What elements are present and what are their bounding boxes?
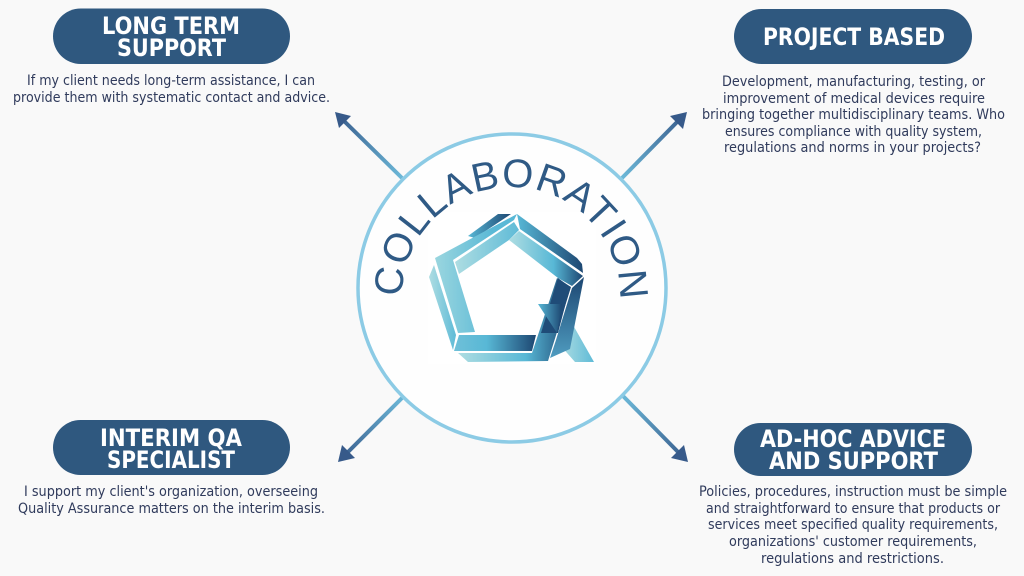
- pill heading: project based: PROJECT BASED: [763, 23, 945, 51]
- pill heading: project based: [734, 9, 972, 64]
- pill heading: long term support: [53, 8, 290, 64]
- text block: project description: bringing together multidisciplinary teams. Who: [702, 107, 1005, 123]
- pill heading: long term support: SUPPORT: [117, 34, 227, 62]
- text block: long term description: provide them with systematic contact and advice.: [13, 90, 330, 106]
- text block: ad-hoc description: regulations and restrictions.: [761, 551, 944, 567]
- panel: project based: [702, 9, 1005, 156]
- text block: long term description: [13, 73, 330, 106]
- arrow: to project based: [622, 112, 687, 178]
- text block: ad-hoc description: Policies, procedures, instruction must be simple: [699, 484, 1007, 500]
- pill heading: long term support: LONG TERM: [102, 12, 240, 40]
- pill heading: interim QA specialist: [53, 420, 290, 475]
- text block: project description: [702, 74, 1005, 156]
- arrow: to long term support: [335, 112, 402, 178]
- arrow: to ad-hoc advice: [623, 396, 688, 462]
- logo: pentagon Q mark: [428, 212, 596, 364]
- text block: ad-hoc description: and straightforward to ensure that products or: [706, 501, 1000, 517]
- pill heading: ad-hoc advice and support: AND SUPPORT: [769, 447, 939, 475]
- pill heading: interim QA specialist: INTERIM QA: [100, 424, 242, 452]
- panel: ad-hoc advice and support: [699, 423, 1007, 567]
- pill heading: interim QA specialist: SPECIALIST: [107, 446, 236, 474]
- text block: long term description: If my client needs long-term assistance, I can: [27, 73, 315, 89]
- pill heading: ad-hoc advice and support: AD-HOC ADVICE: [760, 425, 946, 453]
- text block: project description: improvement of medical devices require: [723, 91, 985, 107]
- text block: interim description: Quality Assurance matters on the interim basis.: [18, 501, 325, 517]
- circular heading: collaboration: COLLABORATION: [375, 159, 648, 296]
- text block: project description: ensures compliance with quality system,: [725, 124, 982, 140]
- text block: interim description: I support my client's organization, overseeing: [24, 484, 318, 500]
- central circle: [358, 134, 666, 442]
- pill heading: ad-hoc advice and support: [734, 423, 972, 476]
- text block: interim description: [18, 484, 325, 517]
- arrow: to interim QA specialist: [338, 397, 403, 462]
- panel: long term support: [13, 8, 330, 106]
- text block: ad-hoc description: organizations' customer requirements,: [729, 534, 977, 550]
- panel: interim QA specialist: [18, 420, 325, 517]
- text block: ad-hoc description: [699, 484, 1007, 567]
- text block: project description: regulations and norms in your projects?: [724, 140, 981, 156]
- text block: project description: Development, manufacturing, testing, or: [722, 74, 985, 90]
- text block: ad-hoc description: services meet specified quality requirements,: [708, 517, 998, 533]
